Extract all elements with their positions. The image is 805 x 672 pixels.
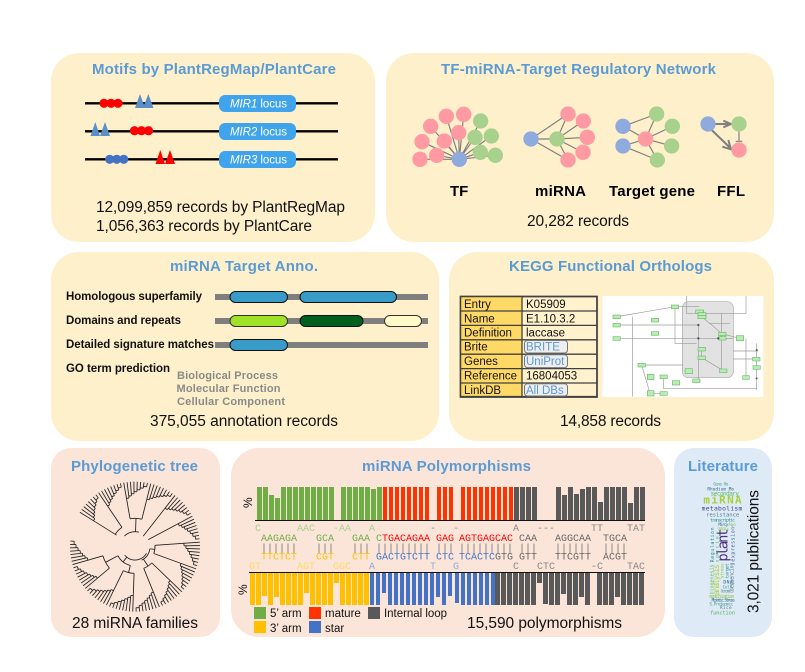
MIR3 locus track	[85, 150, 338, 168]
top bar chart	[241, 487, 645, 520]
aligned sequences: AAGAGA	[261, 534, 297, 545]
network labels: FFL	[717, 183, 745, 200]
word cloud: target	[725, 563, 731, 578]
row: GO term prediction: GO term prediction	[66, 363, 170, 375]
heading: network: TF-miRNA-Target Regulatory Network	[441, 61, 717, 78]
KEGG entry table: Reference	[464, 370, 517, 382]
aligned sequences: TCACTC	[459, 552, 495, 564]
aligned sequences: ||||||	[555, 543, 591, 555]
records text: network: 20,282 records	[527, 213, 629, 230]
word cloud: species	[715, 531, 721, 562]
records text: motifs: 1,056,363 records by PlantCare	[96, 218, 312, 235]
KEGG entry table	[460, 296, 597, 397]
aligned sequences: TGCA	[603, 534, 627, 545]
network labels	[450, 183, 745, 200]
KEGG entry table: All DBs	[526, 385, 564, 397]
aligned sequences: CTC	[537, 562, 555, 573]
KEGG entry table: LinkDB	[464, 385, 501, 397]
panel: phylogenetic tree	[26, 438, 244, 655]
aligned sequences: |||	[316, 543, 334, 555]
aligned sequences: GAG	[436, 534, 454, 545]
aligned sequences: GTT	[519, 552, 537, 564]
legend: 3’ arm	[270, 623, 302, 635]
word cloud: resistance	[706, 513, 740, 519]
aligned sequences: GGC	[333, 562, 351, 573]
row: homologous superfamily	[66, 291, 428, 303]
heading: phylogenetic tree: Phylogenetic tree	[71, 458, 198, 475]
bottom bar chart: %	[236, 584, 250, 595]
MIR2 locus track: MIR2 locus	[230, 126, 287, 138]
legend: star	[325, 623, 344, 635]
word cloud: metabolism	[702, 506, 743, 513]
word cloud: secondary	[711, 490, 739, 497]
circular tree	[26, 438, 244, 655]
word cloud: RNAs	[718, 526, 729, 532]
records text: KEGG: 14,858 records	[560, 413, 661, 430]
aligned sequences: ---	[537, 524, 555, 535]
heading: annotation: miRNA Target Anno.	[170, 258, 318, 275]
panel: target annotation	[51, 252, 439, 441]
aligned sequences: |||	[519, 543, 537, 555]
records text: annotation: 375,055 annotation records	[150, 413, 338, 430]
word cloud: Rice	[720, 605, 732, 611]
panel: KEGG	[449, 252, 774, 441]
caption: publications: 3,021 publications	[746, 490, 762, 613]
word cloud: miRNA	[703, 494, 742, 507]
aligned sequences: G	[453, 562, 459, 573]
aligned sequences: GAA	[352, 534, 370, 545]
word cloud: Rhodium Mo	[707, 486, 734, 492]
aligned sequences: TTCTCT	[261, 552, 297, 564]
panel: miRNA polymorphisms	[231, 448, 665, 637]
aligned sequences: TAT	[627, 524, 645, 535]
KEGG entry table: laccase	[526, 328, 565, 340]
panel: motifs	[51, 53, 375, 242]
aligned sequences: A	[369, 524, 375, 535]
legend: mature	[325, 608, 361, 620]
aligned sequences: A	[369, 562, 375, 573]
row: homologous superfamily: Homologous superfamily	[66, 291, 203, 303]
row: detailed signature matches: Detailed signature matches	[66, 339, 214, 351]
network labels: miRNA	[535, 183, 586, 200]
target gene network	[615, 106, 680, 168]
word cloud: expression	[730, 527, 736, 562]
word cloud: Mircy	[718, 522, 729, 528]
aligned sequences: GCA	[316, 534, 334, 545]
word cloud: Genomics	[721, 589, 734, 595]
FFL network	[700, 116, 747, 158]
heading: motifs: Motifs by PlantRegMap/PlantCare	[92, 61, 336, 78]
aligned sequences: CAA	[519, 534, 537, 545]
caption: polymorphisms: 15,590 polymorphisms	[467, 615, 622, 632]
aligned sequences: AGTGAGCAC	[459, 534, 513, 545]
aligned sequences: A	[513, 524, 519, 535]
network labels: TF	[450, 183, 468, 200]
aligned sequences: |||||||||	[376, 543, 430, 555]
heading: literature: Literature	[688, 458, 758, 475]
records text: motifs	[96, 199, 345, 235]
row: GO term prediction	[66, 363, 285, 408]
TF network	[412, 107, 503, 167]
MIR3 locus track: MIR3 locus	[230, 154, 287, 166]
word cloud: stress	[719, 563, 725, 578]
aligned sequences: |||||||||	[459, 543, 513, 555]
word cloud: S.Proteomic	[709, 601, 734, 607]
aligned sequences: ||||	[603, 543, 627, 555]
aligned sequences: AGT	[297, 562, 315, 573]
word cloud: Ago	[728, 522, 736, 527]
KEGG entry table: Definition	[464, 328, 512, 340]
row: domains and repeats	[66, 315, 428, 327]
KEGG entry table: 16804053	[526, 370, 577, 382]
word cloud: DNA	[723, 580, 733, 586]
aligned sequences: AGGCAA	[555, 534, 591, 545]
heading: polymorphisms: miRNA Polymorphisms	[362, 458, 531, 475]
aligned sequences: TAC	[627, 562, 645, 573]
aligned sequences: CGT	[316, 552, 334, 564]
word cloud: Regulation	[710, 527, 716, 562]
KEGG entry table: Genes	[464, 356, 498, 368]
MIR1 locus track: MIR1 locus	[230, 98, 287, 110]
word cloud	[702, 482, 743, 617]
aligned sequences: TTCGTT	[555, 552, 591, 564]
KEGG pathway map	[602, 296, 763, 397]
word cloud: transcriptic	[710, 517, 735, 523]
miRNA network	[523, 106, 595, 168]
word cloud: function	[710, 611, 735, 617]
aligned sequences	[249, 524, 645, 573]
legend: 5’ arm	[270, 608, 302, 620]
top bar chart: %	[241, 497, 255, 508]
legend: Internal loop	[384, 608, 447, 620]
records text: motifs: 12,099,859 records by PlantRegMap	[96, 199, 345, 216]
aligned sequences: TGACAGAA	[382, 534, 430, 545]
aligned sequences: CTC	[436, 552, 454, 564]
network diagrams	[412, 106, 747, 168]
aligned sequences: -C	[591, 562, 603, 573]
bottom bar chart	[236, 572, 645, 605]
aligned sequences: |||	[436, 543, 454, 555]
aligned sequences: -AA	[333, 524, 351, 535]
aligned sequences: -	[430, 524, 436, 535]
aligned sequences: TT	[591, 524, 603, 535]
word cloud: Cell	[723, 584, 732, 590]
row: GO term prediction: Cellular Component	[177, 396, 285, 408]
aligned sequences: ACGT	[603, 552, 627, 564]
row: detailed signature matches	[66, 339, 428, 351]
word cloud: Meiotic Stress	[712, 598, 735, 604]
panel: regulatory network	[386, 53, 774, 242]
word cloud: sequencing	[729, 563, 735, 591]
caption: miRNA families: 28 miRNA families	[72, 615, 198, 632]
word cloud: biogenesis	[709, 564, 715, 594]
KEGG entry table: Name	[464, 313, 495, 325]
aligned sequences: C	[513, 562, 519, 573]
KEGG entry table: Entry	[464, 299, 491, 311]
aligned sequences: GT	[249, 562, 261, 573]
KEGG entry table: BRITE	[526, 342, 560, 354]
word cloud: analysis	[712, 564, 721, 595]
aligned sequences: CTT	[352, 552, 370, 564]
KEGG entry table: Brite	[464, 342, 488, 354]
aligned sequences: AAC	[297, 524, 315, 535]
MIR2 locus track	[85, 122, 338, 140]
row: GO term prediction: Biological Process	[177, 370, 278, 382]
aligned sequences: GACTGTCTT	[376, 552, 430, 564]
word cloud: Gene Ho	[713, 482, 729, 488]
aligned sequences: T	[430, 562, 436, 573]
aligned sequences: -	[453, 524, 459, 535]
aligned sequences: ||||||	[261, 543, 297, 555]
aligned sequences: C	[376, 534, 382, 545]
word cloud: plant	[715, 528, 731, 562]
KEGG entry table: K05909	[526, 299, 566, 311]
MIR1 locus track	[85, 94, 338, 112]
KEGG entry table: UniProt	[526, 356, 565, 368]
aligned sequences: GTG	[495, 552, 513, 564]
network labels: Target gene	[609, 183, 695, 200]
legend	[254, 607, 447, 635]
word cloud: modification	[709, 594, 734, 600]
row: domains and repeats: Domains and repeats	[66, 315, 181, 327]
aligned sequences: |||	[352, 543, 370, 555]
aligned sequences: C	[255, 524, 261, 535]
heading: KEGG: KEGG Functional Orthologs	[509, 258, 712, 275]
KEGG entry table: E1.10.3.2	[526, 313, 575, 325]
panel: literature	[674, 448, 772, 637]
row: GO term prediction: Molecular Function	[176, 383, 281, 395]
